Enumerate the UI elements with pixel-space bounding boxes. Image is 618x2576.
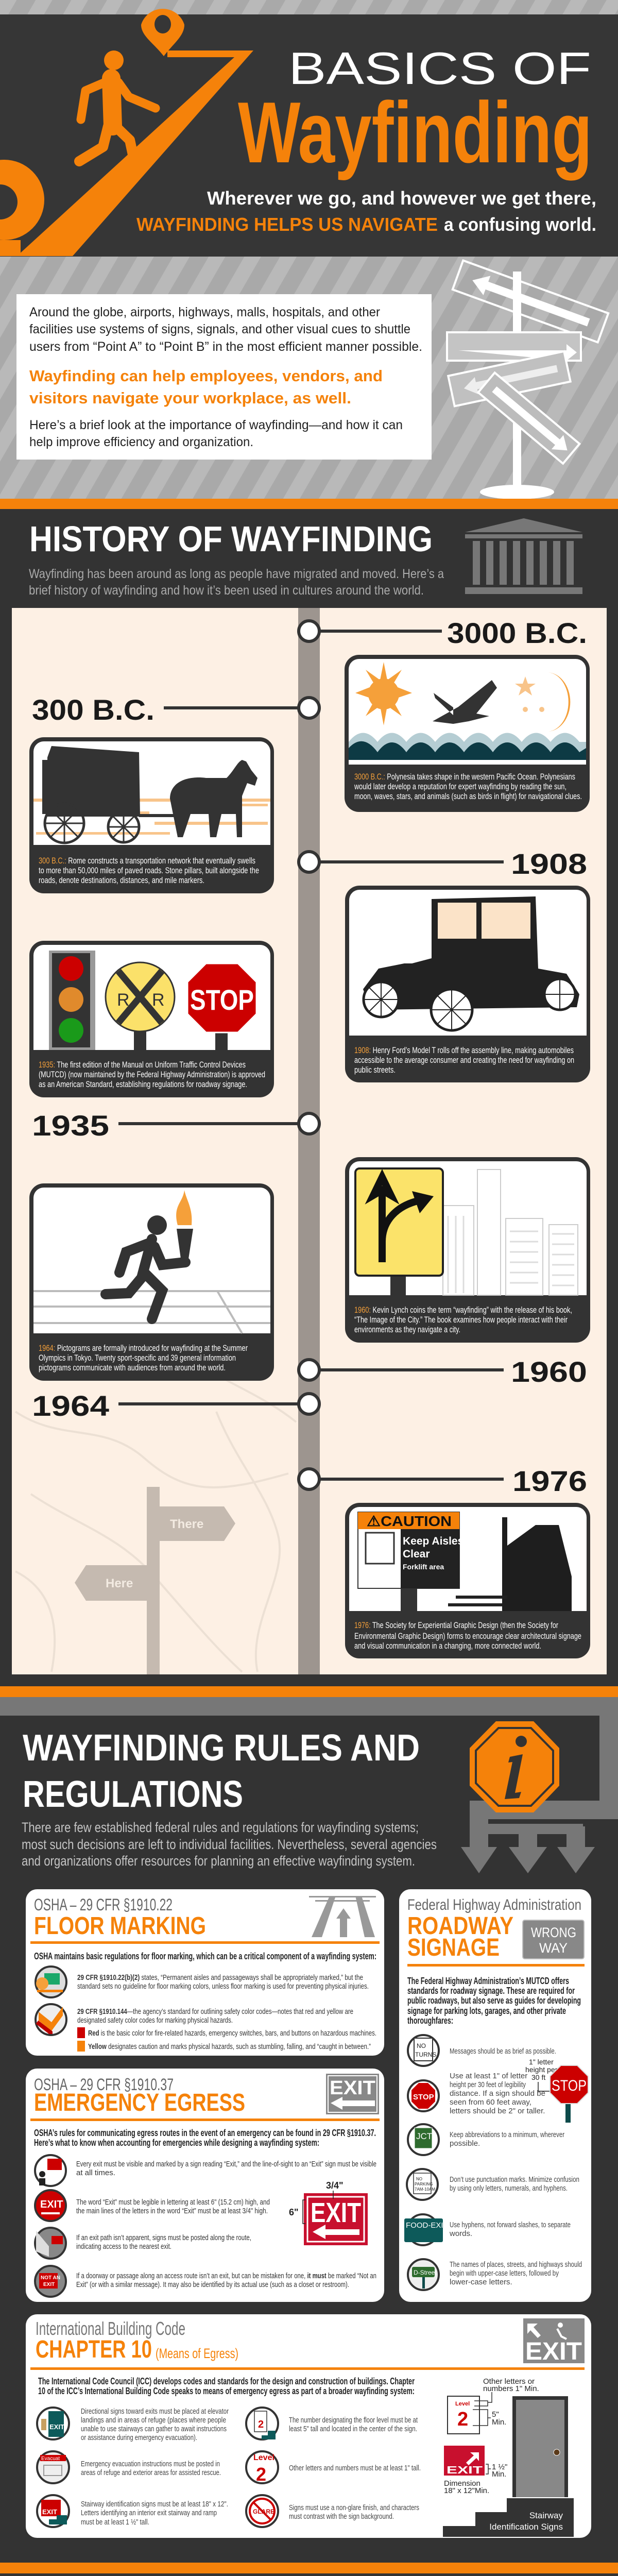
timeline panel lower — [12, 1144, 607, 1674]
card: 1960: environments as they navigate a city. — [354, 1325, 460, 1334]
intro text box: facilities use systems of signs, signals, and other visual cues to shuttle — [29, 322, 410, 336]
card: 1935: STOP — [190, 984, 254, 1016]
timeline node: 1976: 1976 — [512, 1465, 587, 1497]
card: 1960 — [345, 1157, 590, 1343]
illustration: stairway identification signs: EXIT — [447, 2465, 483, 2476]
icon: big stop with label — [525, 2058, 588, 2123]
card: emergency egress: If a doorway or passage along an access route isn’t an exit, but can be mistaken for one, it must be marked “Not an — [76, 2272, 376, 2280]
rules intro text: and organizations offer resources for planning an effective wayfinding system. — [22, 1853, 415, 1869]
timeline panel upper — [12, 608, 607, 1144]
card: international building code: or assistance during emergency evacuation). — [81, 2433, 197, 2442]
icon: no glare: GLARE — [253, 2508, 274, 2515]
icon: large exit sign with dimensions — [289, 2180, 368, 2245]
card: roadway signage: Use at least 1" of letter — [450, 2072, 527, 2080]
card: emergency egress: Here’s what to know when accounting for emergencies while designing a wayfinding system: — [34, 2138, 319, 2148]
illustration: stairway identification signs: 1 ½" — [492, 2463, 507, 2471]
timeline node: 300 BC — [32, 693, 319, 726]
icon: evacuation map — [37, 2451, 69, 2483]
icon: big stop with label: 1" letter — [529, 2058, 554, 2066]
icon: junction — [408, 2124, 439, 2155]
card: international building code — [26, 2314, 591, 2538]
timeline node: 1908 — [299, 848, 587, 880]
card: international building code: Emergency evacuation instructions must be posted in — [81, 2460, 220, 2468]
card: roadway signage: distance. If a sign should be — [450, 2089, 545, 2098]
intro text box: Around the globe, airports, highways, malls, hospitals, and other — [29, 305, 380, 319]
icon: walking person — [79, 50, 156, 161]
timeline node: 1960: 1960 — [511, 1355, 587, 1388]
icon: gray exit sign — [326, 2074, 379, 2114]
timeline node: 1935: 1935 — [32, 1109, 109, 1142]
icon: no turns: NO — [417, 2042, 426, 2049]
timeline axis lower — [298, 1144, 320, 1674]
timeline node: 1976 — [299, 1465, 587, 1497]
icon: directional exit: EXIT — [49, 2423, 64, 2431]
card: floor marking: OSHA maintains basic regulations for floor marking, which can be a critical component of a wayfinding system: — [34, 1951, 376, 1961]
icon: food exit: FOOD-EXIT1 — [406, 2221, 452, 2230]
intro text box: help improve efficiency and organization. — [29, 435, 253, 449]
card: roadway signage: Use hyphens, not forward slashes, to separate — [450, 2221, 571, 2229]
card: emergency egress: The word “Exit” must be legible in lettering at least 6" (15.2 cm) high, and — [76, 2198, 270, 2207]
timeline node: 1960 — [299, 1355, 587, 1388]
header panel — [0, 9, 618, 257]
card: roadway signage: Don’t use punctuation marks. Minimize confusion — [450, 2175, 579, 2184]
icon: no parking: NO — [416, 2177, 422, 2181]
illustration: stairway identification signs: Dimension — [444, 2479, 480, 2488]
card: emergency egress: Exit” (or with a similar message). It may also be identified by its actual use (such as a closet or restroom). — [76, 2280, 349, 2289]
card: 1964: 1964: Pictograms are formally introduced for wayfinding at the Summer — [39, 1343, 248, 1353]
rules intro text: most such decisions are left to individual facilities. Nevertheless, several agencies — [22, 1837, 437, 1852]
card: floor marking: FLOOR MARKING — [34, 1912, 206, 1940]
card: roadway signage: words. — [449, 2229, 472, 2238]
card: 1976: Forklift area — [403, 1563, 444, 1571]
icon: large exit sign with dimensions: 6" — [289, 2207, 299, 2217]
illustration: stairway identification signs: Other letters or — [483, 2377, 535, 2386]
icon: gray exit sign: EXIT — [330, 2077, 375, 2099]
card: roadway signage: Messages should be as brief as possible. — [450, 2047, 556, 2056]
timeline node: 1964 — [32, 1389, 319, 1422]
icon: no glare — [246, 2495, 278, 2527]
icon: wrong way sign: WRONG — [531, 1925, 576, 1940]
card: 1964 — [29, 1183, 274, 1381]
card: 1935: (MUTCD) (now maintained by the Federal Highway Administration) is approved — [39, 1070, 265, 1079]
icon: junction: JCT — [416, 2131, 432, 2141]
orange divider — [0, 499, 618, 509]
card: international building code: least 5" tall and located in the center of the sign. — [289, 2425, 417, 2433]
card: floor marking: 29 CFR §1910.144—the agency’s standard for outlining safety color codes—notes that red and yellow are — [77, 2007, 353, 2016]
card: emergency egress: OSHA’s rules for communicating egress routes in the event of an emergency can be found in 29 CFR §1910.37. — [34, 2128, 376, 2138]
card: international building code: must contrast with the sign background. — [289, 2512, 394, 2521]
card: roadway signage: possible. — [450, 2139, 480, 2148]
icon: three arrows down — [461, 1824, 595, 1873]
card: roadway signage: height per 30 feet of legibility — [450, 2080, 526, 2089]
illustration: stairway identification signs: Identification Signs — [489, 2522, 563, 2532]
card: roadway signage: seen from 60 feet away, — [450, 2098, 531, 2107]
icon: no parking: 7AM-10AM — [415, 2187, 435, 2192]
icon: exit path — [35, 2228, 66, 2259]
card: 1908: public streets. — [354, 1065, 396, 1075]
orange divider — [0, 2563, 618, 2573]
card: emergency egress: OSHA – 29 CFR §1910.37 — [34, 2075, 174, 2094]
card: international building code: 10 of the ICC’s International Building Code speaks to means of emergency egress as part of a broader wayfinding system: — [38, 2386, 415, 2396]
intro text box: users from “Point A” to “Point B” in the most efficient manner possible. — [29, 340, 422, 354]
icon: large exit sign with dimensions: 3/4" — [326, 2180, 344, 2191]
title: basics of: BASICS OF — [288, 43, 591, 94]
illustration: stairway identification signs: Min. — [492, 2470, 506, 2479]
illustration: stairway identification signs: 5" — [492, 2410, 499, 2419]
panel: types of signage header — [0, 2555, 618, 2576]
icon: here/there signpost: Here — [106, 1577, 133, 1590]
icon: directional exit — [37, 2408, 69, 2439]
timeline node: 3000 BC — [299, 617, 587, 649]
card: emergency egress — [26, 2069, 384, 2302]
card: roadway signage — [399, 1889, 591, 2302]
card: 1976 — [345, 1503, 590, 1658]
card: international building code: Letters identifying an interior exit stairway and ramp — [81, 2509, 217, 2517]
illustration: stairway identification signs: Level — [455, 2401, 470, 2407]
card: floor marking: 29 CFR §1910.22(b)(2) states, “Permanent aisles and passageways shall be appropriately marked,” but the — [77, 1973, 363, 1982]
card: international building code: (Means of Egress) — [156, 2346, 238, 2361]
icon: level 2 small: 2 — [258, 2419, 264, 2430]
icon: exit lettering — [35, 2190, 66, 2221]
card: 1935: as an American Standard, establishing regulations for roadway signage. — [39, 1079, 247, 1089]
icon: stair exit: EXIT — [42, 2508, 57, 2516]
illustration: stairway identification signs — [443, 2377, 574, 2537]
card: international building code: landings and in areas of refuge (places where people — [81, 2416, 226, 2425]
intro text box — [16, 294, 432, 460]
icon: signpost — [447, 261, 608, 499]
illustration: stairway identification signs: 2 — [457, 2409, 468, 2430]
card: 1935: R — [117, 990, 130, 1010]
icon: not an exit — [35, 2266, 66, 2297]
card: 1976: Clear — [403, 1548, 430, 1560]
icon: no parking — [407, 2169, 438, 2200]
icon: level 2 large: Level — [253, 2453, 274, 2462]
intro text box: visitors navigate your workplace, as well. — [29, 389, 351, 407]
card: 300 BC: to more than 50,000 miles of paved roads. Stone pillars, built alongside the — [39, 866, 259, 875]
icon: no turns — [408, 2035, 439, 2066]
icon: evacuation map: Evacuat — [41, 2456, 60, 2462]
icon: food exit — [404, 2214, 452, 2245]
card: international building code: CHAPTER 10 — [36, 2336, 152, 2363]
icon: no parking: PARKING — [415, 2182, 433, 2187]
icon: gray exit stair sign: EXIT — [525, 2338, 582, 2365]
card: floor marking: designated safety color codes for marking physical hazards. — [77, 2016, 233, 2025]
card: roadway signage: Keep abbreviations to a minimum, wherever — [450, 2130, 564, 2139]
card: 300 BC: 300 B.C.: Rome constructs a transportation network that eventually swells — [39, 856, 255, 866]
card: 1976: and visual communication in a changing, more connected world. — [354, 1641, 541, 1651]
intro text box: Here’s a brief look at the importance of wayfinding—and how it can — [29, 418, 403, 432]
card: roadway signage: SIGNAGE — [407, 1934, 500, 1961]
card: international building code: Signs must use a non-glare finish, and characters — [289, 2503, 419, 2512]
heading: rules and regulations: REGULATIONS — [23, 1774, 243, 1815]
icon: start ring — [0, 160, 44, 256]
intro text box: Wayfinding can help employees, vendors, and — [29, 367, 383, 385]
timeline node: 1935 — [32, 1109, 319, 1142]
card: emergency egress: If an exit path isn’t apparent, signs must be posted along the route, — [76, 2233, 251, 2242]
card: 1908 — [345, 886, 590, 1082]
orange divider — [0, 1686, 618, 1697]
card: international building code: unable to use stairways can gather to await instructions — [81, 2425, 227, 2433]
card: international building code: Stairway identification signs must be at least 18" x 12". — [81, 2500, 228, 2509]
illustration: stairway identification signs: 18" x 12"Min. — [444, 2486, 489, 2495]
card: floor marking: OSHA – 29 CFR §1910.22 — [34, 1895, 173, 1914]
icon: not an exit: NOT AN — [41, 2275, 60, 2281]
card: roadway signage: lower-case letters. — [450, 2278, 512, 2286]
icon: stair exit — [37, 2495, 69, 2527]
card: emergency egress: at all times. — [76, 2168, 115, 2177]
card: 1976: ⚠CAUTION — [367, 1513, 452, 1529]
history intro text: brief history of wayfinding and how it’s been used in cultures around the world. — [29, 583, 424, 598]
icon: level 2 large — [246, 2451, 278, 2485]
card: 300 BC: roads, denote destinations, distances, and mile markers. — [39, 875, 204, 885]
icon: wrong way sign: WAY — [539, 1940, 568, 1956]
icon: stop small: STOP — [413, 2093, 434, 2102]
card: floor marking — [26, 1889, 384, 2056]
icon: here/there signpost: There — [170, 1517, 203, 1531]
subtitle: Wherever we go, and however we get there, — [207, 188, 596, 209]
illustration: stairway identification signs: Stairway — [529, 2511, 563, 2520]
subtitle: a confusing world. — [444, 214, 596, 235]
section: history top — [12, 518, 607, 1144]
map background lines — [15, 1350, 296, 1672]
subtitle — [136, 188, 596, 235]
icon: big stop with label: height per — [525, 2065, 558, 2074]
card: 1976: Keep Aisles — [403, 1535, 464, 1547]
card: emergency egress: the main lines of the letters in the word “Exit” must be at least 3/4" high. — [76, 2207, 268, 2215]
icon: street name — [408, 2259, 439, 2290]
card: emergency egress: indicating access to the nearest exit. — [76, 2242, 171, 2251]
card: 300 BC — [29, 737, 274, 893]
card: roadway signage: by using only letters, numerals, and hyphens. — [450, 2184, 568, 2193]
heading: history: HISTORY OF WAYFINDING — [29, 519, 433, 559]
card: roadway signage: thoroughfares: — [407, 2015, 453, 2026]
icon: wrong way sign — [523, 1920, 584, 1959]
gray pipe band — [0, 1697, 618, 1826]
card: international building code: Other letters and numbers must be at least 1" tall. — [289, 2464, 421, 2472]
icon: level 2 large: 2 — [256, 2464, 266, 2485]
timeline node: 1908: 1908 — [511, 848, 587, 880]
rules intro text — [22, 1820, 437, 1869]
section: header and intro — [0, 0, 618, 509]
card: emergency egress: EMERGENCY EGRESS — [34, 2089, 245, 2116]
icon: here/there signpost — [75, 1487, 235, 1674]
icon: location pin — [141, 9, 184, 56]
rules intro text: There are few established federal rules and regulations for wayfinding systems; — [22, 1820, 419, 1835]
heading: rules and regulations: WAYFINDING RULES AND — [23, 1727, 420, 1769]
card: international building code: Directional signs toward exits must be placed at elevator — [81, 2407, 229, 2416]
history intro text — [29, 567, 444, 598]
card: floor marking: Yellow designates caution and marks physical hazards, such as stumbling, falling, and “caught in between.” — [88, 2042, 371, 2051]
timeline node: 300 BC: 300 B.C. — [32, 693, 154, 726]
icon: info octagon — [470, 1721, 559, 1812]
icon: big stop with label: 30 ft — [531, 2073, 545, 2081]
card: 1935: 1935: The first edition of the Manual on Uniform Traffic Control Devices — [39, 1060, 246, 1070]
icon: visible exit — [35, 2155, 66, 2186]
icon: street name: D-Street — [414, 2269, 437, 2276]
card: 1935 — [29, 941, 274, 1097]
card: international building code: areas of refuge and exterior areas for assisted rescue. — [81, 2468, 221, 2477]
icon: level 2 small — [246, 2408, 278, 2439]
timeline axis upper — [298, 608, 320, 1144]
icon: big stop with label: STOP — [552, 2077, 587, 2094]
card: 1964: pictograms communicate with audiences from around the world. — [39, 1363, 226, 1372]
icon: safety colors — [36, 2004, 66, 2035]
section: building code and types header — [0, 2314, 618, 2576]
section: history bottom — [0, 1144, 618, 1697]
section: rules top — [0, 1697, 618, 2302]
card: roadway signage: letters should be 2" or taller. — [450, 2107, 545, 2115]
icon: temple — [465, 518, 582, 594]
icon: road arrow — [309, 1896, 376, 1937]
illustration: stairway identification signs: Min. — [492, 2418, 506, 2427]
card: 1935: R — [152, 990, 165, 1010]
card: international building code: International Building Code — [36, 2318, 185, 2339]
illustration: stairway identification signs: numbers 1" Min. — [483, 2384, 539, 2393]
heading: rules and regulations — [23, 1727, 420, 1815]
icon: floor items — [36, 1967, 66, 1997]
card: floor marking: standard sets no guideline for floor marking colors, unless floor marking is used for preventing physical injuries. — [77, 1982, 369, 1991]
card: roadway signage: ROADWAY — [407, 1912, 513, 1940]
icon: stop small — [408, 2080, 439, 2111]
timeline node: 3000 BC: 3000 B.C. — [447, 617, 587, 649]
icon: gray exit stair sign — [523, 2318, 585, 2365]
history intro text: Wayfinding has been around as long as people have migrated and moved. Here’s a — [29, 567, 444, 581]
icon: orange path band — [17, 50, 253, 256]
card: floor marking: Red is the basic color for fire-related hazards, emergency switches, bars, and buttons on hazardous machines. — [88, 2029, 376, 2038]
card: international building code: The International Code Council (ICC) develops codes and standards for the design and construction of buildings. Chapter — [38, 2376, 415, 2386]
card: 1976: 1976: The Society for Experiential Graphic Design (then the Society for — [354, 1620, 558, 1630]
icon: no turns: TURNS — [415, 2051, 436, 2058]
card: roadway signage: begin with upper-case letters, followed by — [450, 2269, 559, 2278]
icon: large exit sign with dimensions: EXIT — [311, 2197, 361, 2228]
card: 3000 BC — [345, 655, 590, 812]
icon: exit lettering: EXIT — [40, 2199, 63, 2210]
timeline node: 1964: 1964 — [32, 1389, 109, 1422]
card: international building code: The number designating the floor level must be at — [289, 2416, 418, 2425]
subtitle: WAYFINDING HELPS US NAVIGATE — [136, 214, 438, 235]
card: emergency egress: Every exit must be visible and marked by a sign reading “Exit,” and the line-of-sight to an “Exit” sign must be visible — [76, 2160, 376, 2168]
icon: not an exit: EXIT — [43, 2282, 55, 2287]
card: 1964: Olympics in Tokyo. Twenty sport-specific and 39 general information — [39, 1353, 236, 1363]
card: international building code: must be at least 1 ½" tall. — [81, 2518, 149, 2527]
